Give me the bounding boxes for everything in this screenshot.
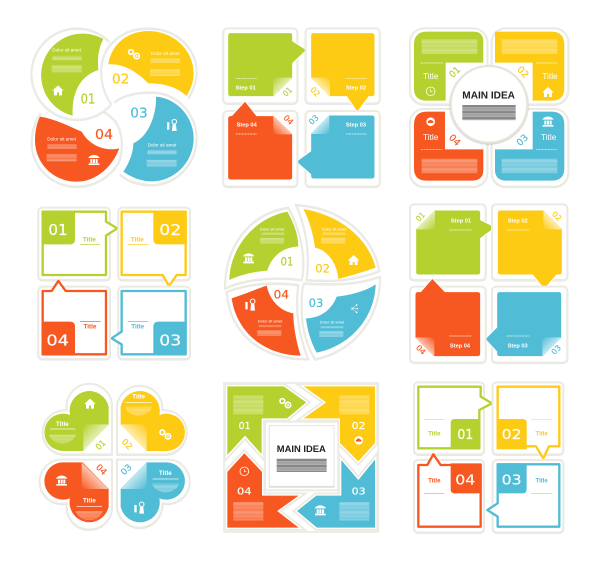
tile step 02 yellow: 02 (308, 85, 322, 99)
tile step 01 green: 01 (414, 210, 427, 223)
segment 04 red circle: 04 (95, 128, 113, 143)
frame 03 blue (487, 460, 563, 532)
segment 03 blue circle: Dolor sit amet (148, 142, 177, 147)
segment 01 green circle: 01 (81, 93, 95, 108)
tile 04 red: 04 (446, 132, 462, 149)
arrow 03 blue (296, 458, 376, 528)
tile step 04 red (410, 278, 486, 363)
frame 02 yellow (118, 208, 190, 286)
frame 02 yellow: Title (131, 237, 144, 244)
frame 01 green: Title (83, 237, 96, 244)
frame 01 green: Title (428, 432, 441, 438)
tile step 04 red: 04 (282, 113, 295, 127)
segment 04 red (227, 283, 308, 359)
frame 04 red: 04 (46, 332, 69, 349)
arrow 01 green: 01 (239, 421, 251, 432)
tile step 03 blue (296, 111, 380, 187)
frame 03 blue: Title (131, 323, 145, 330)
heart 04 red: Title (83, 497, 96, 504)
tile step 04 red: 04 (414, 343, 428, 357)
frame 03 blue: Title (536, 478, 548, 484)
tile step 01 green (410, 204, 496, 280)
segment 03 blue circle: 03 (130, 107, 148, 122)
tile 01 green: Title (423, 71, 439, 81)
segment 01 green: 01 (281, 255, 293, 269)
frame 02 yellow (493, 382, 563, 458)
frame 02 yellow: 02 (502, 428, 522, 443)
heart 04 red (40, 460, 112, 530)
segment 01 green (225, 208, 303, 288)
center square main idea: MAIN IDEA (277, 444, 326, 454)
frame 03 blue: 03 (502, 473, 522, 488)
center circle main idea: MAIN IDEA (462, 90, 515, 101)
tile 02 yellow (492, 28, 568, 104)
segment 03 blue circle (114, 92, 197, 185)
frame 01 green: 01 (457, 428, 473, 443)
segment 04 red: Dolor sit amet (258, 319, 283, 324)
panel: outlined frames B (414, 382, 563, 532)
tile step 02 yellow (492, 204, 567, 289)
tile step 04 red (223, 101, 297, 187)
segment 02 yellow: 02 (315, 261, 330, 275)
frame 02 yellow: Title (536, 432, 548, 438)
tile 03 blue: 03 (515, 132, 531, 149)
panel: four hearts (40, 384, 190, 530)
tile 03 blue: Title (541, 132, 557, 142)
arrow 02 yellow (302, 386, 376, 462)
frame 01 green: 01 (48, 222, 68, 239)
panel: swirl disc (225, 205, 380, 359)
tile step 02 yellow (306, 28, 380, 112)
tile step 03 blue: 03 (307, 113, 321, 127)
heart 03 blue (117, 460, 190, 528)
panel: main idea square with arrows (224, 383, 378, 532)
heart 01 green (43, 384, 112, 454)
arrow 03 blue: 03 (352, 486, 366, 497)
tile step 01 green: Step 01 (236, 86, 256, 92)
frame 04 red: Title (84, 323, 97, 330)
center square main idea (265, 422, 338, 490)
tile step 01 green: 01 (281, 85, 294, 98)
segment 03 blue (302, 277, 380, 359)
heart 01 green: Title (56, 421, 69, 428)
tile step 01 green: Step 01 (451, 218, 471, 224)
segment 02 yellow circle: Dolor sit amet (151, 51, 180, 56)
frame 03 blue: 03 (159, 332, 181, 349)
segment 04 red: 04 (274, 288, 289, 302)
tile step 03 blue: 03 (549, 343, 563, 357)
heart 04 red: 04 (93, 463, 109, 478)
heart 02 yellow: 02 (119, 437, 134, 452)
segment 02 yellow: Dolor sit amet (322, 226, 347, 231)
panel: folded step tiles B (410, 204, 567, 363)
arrow 02 yellow: 02 (352, 421, 366, 432)
tile 01 green (410, 28, 487, 104)
tile step 02 yellow: Step 02 (508, 218, 528, 224)
tile step 03 blue: Step 03 (508, 343, 528, 349)
tile 04 red: Title (423, 132, 439, 142)
frame 03 blue (112, 287, 190, 359)
heart 02 yellow: Title (132, 393, 146, 400)
tile step 04 red: Step 04 (237, 123, 258, 129)
frame 02 yellow: 02 (159, 222, 181, 239)
frame 01 green (414, 382, 492, 454)
arrow 01 green (227, 386, 307, 457)
segment 03 blue: Dolor sit amet (320, 320, 345, 325)
segment 03 blue: 03 (309, 296, 323, 310)
heart 02 yellow (117, 386, 187, 454)
segment 01 green circle (31, 28, 111, 120)
heart 03 blue: 03 (119, 463, 134, 478)
panel: outlined frames A (38, 208, 190, 359)
tile step 02 yellow: Step 02 (346, 86, 366, 92)
segment 04 red circle: Dolor sit amet (47, 136, 77, 141)
panel: main idea circle with four tiles (410, 28, 568, 187)
panel: folded step tiles A (223, 28, 380, 187)
segment 02 yellow circle: 02 (112, 73, 129, 88)
frame 04 red: Title (428, 478, 441, 484)
tile 04 red (410, 109, 487, 187)
segment 04 red circle (32, 112, 122, 187)
tile 01 green: 01 (447, 65, 463, 80)
tile step 01 green (223, 28, 307, 103)
frame 04 red (414, 454, 484, 532)
heart 01 green: 01 (94, 438, 108, 453)
arrow 04 red (227, 452, 301, 528)
tile step 02 yellow: 02 (550, 209, 564, 223)
segment 01 green: Dolor sit amet (260, 226, 285, 231)
tile 03 blue (492, 109, 568, 187)
tile 02 yellow: Title (542, 71, 558, 81)
tile 02 yellow: 02 (514, 64, 531, 81)
frame 04 red: 04 (455, 473, 475, 488)
tile step 03 blue (485, 287, 567, 363)
segment 02 yellow circle (101, 28, 197, 104)
panel: overlapping circles diagram (31, 28, 197, 187)
frame 04 red (38, 281, 110, 359)
heart 03 blue: Title (159, 470, 172, 477)
segment 02 yellow (296, 205, 379, 281)
tile step 04 red: Step 04 (450, 343, 471, 349)
outer frame (224, 383, 378, 532)
segment 01 green circle: Dolor sit amet (52, 48, 82, 53)
center circle main idea (451, 66, 527, 143)
frame 01 green (38, 208, 117, 280)
arrow 04 red: 04 (237, 486, 252, 497)
tile step 03 blue: Step 03 (346, 123, 366, 129)
